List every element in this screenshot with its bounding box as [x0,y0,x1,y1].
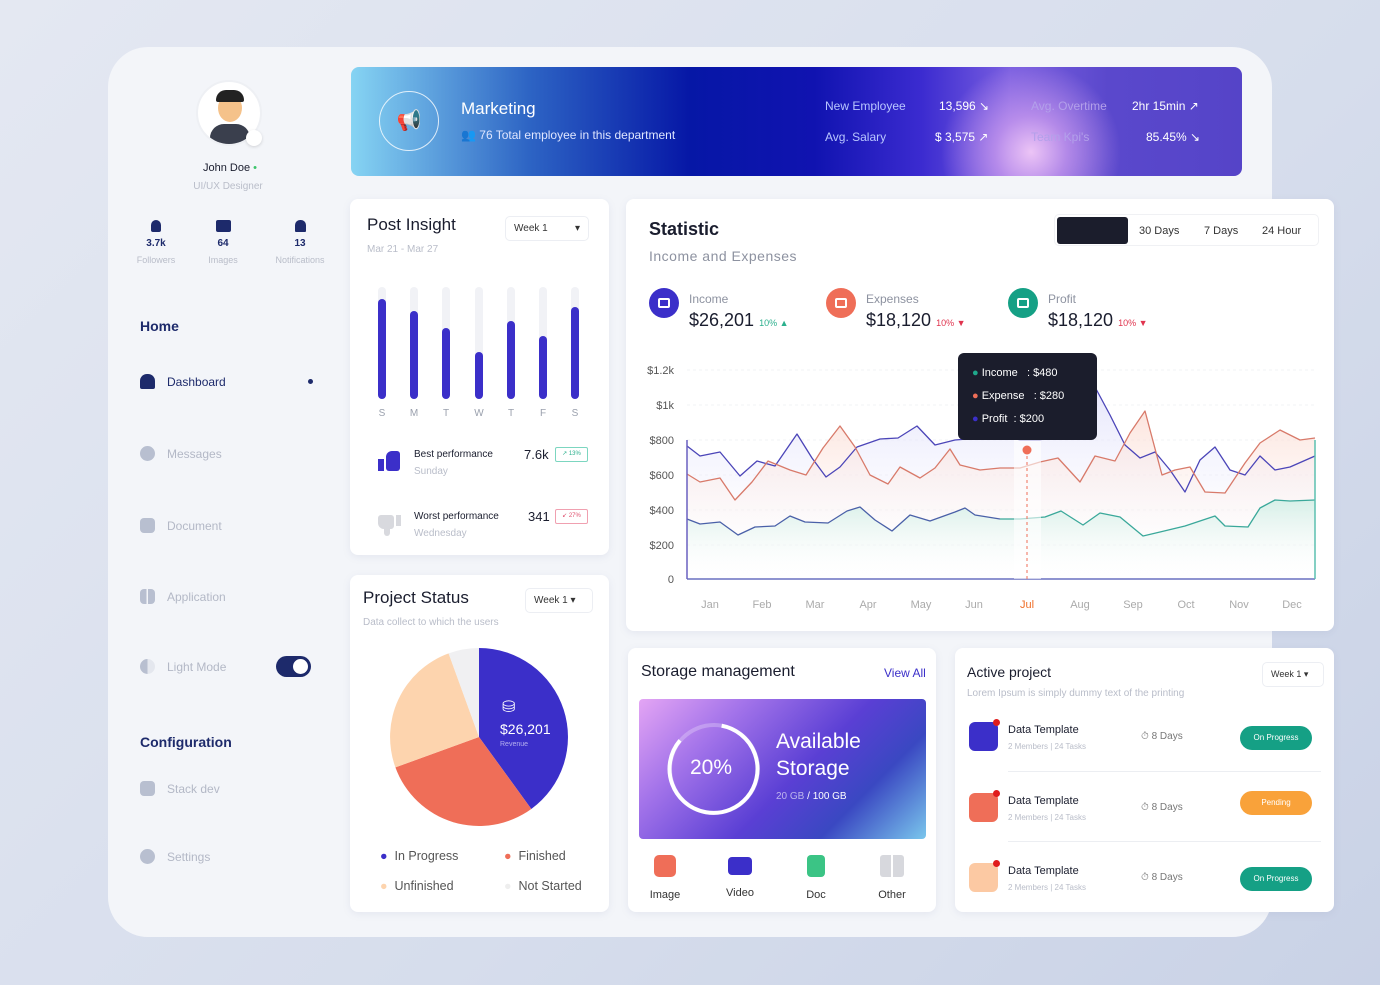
panel: post insight: Week 1 [514,223,548,234]
project row 3: Data Template [1008,865,1079,877]
line chart: $200 [650,540,674,552]
line chart: $400 [650,505,674,517]
panel: post insight: Mar 21 - Mar 27 [367,244,438,255]
project row 3 [969,860,1312,892]
nav: settings: Settings [167,850,210,864]
name: John Doe • [203,162,257,174]
bar chart: T [443,408,449,419]
line chart: Jan [701,599,719,611]
storage icons [650,855,906,901]
panel: active project [955,648,1334,912]
banner stats: New Employee [825,99,906,113]
storage card: Available [776,730,861,753]
nav: application: Application [167,590,226,604]
panel: project status: Week 1 ▾ [534,595,576,606]
tooltip: ● Income : $480 [972,367,1058,379]
banner stats: Avg. Overtime [1031,99,1107,113]
stats [137,220,325,265]
line chart: $1k [656,400,674,412]
nav: stack dev: Stack dev [167,782,220,796]
worst performance: ↙ 27% [562,513,581,519]
banner: marketing: 👥 76 Total employee in this department [461,128,675,142]
project row 2: Pending [1261,798,1291,807]
stats: 13 [294,238,306,249]
panel: post insight: ▾ [575,223,580,234]
nav: settings [140,849,210,864]
bar chart: F [540,408,546,419]
banner stats: 2hr 15min ↗ [1132,99,1199,113]
line chart: Feb [753,599,771,611]
panel: post insight: Post Insight [367,215,456,234]
kpi: income: $26,201 10% ▲ [689,310,788,330]
bar chart: S [379,408,386,419]
storage icons: Doc [806,889,826,901]
nav: light mode: Light Mode [167,660,226,674]
storage card: 20 GB / 100 GB [776,791,847,802]
line chart: $800 [650,435,674,447]
sidebar profile [193,82,263,192]
nav: dashboard: Dashboard [167,374,226,388]
stats: 3.7k [146,238,166,249]
time tabs: 30 Days [1139,225,1179,237]
panel: project status: Data collect to which the users [363,617,499,628]
project row 3: ⏱ 8 Days [1141,872,1183,883]
best performance: ↗ 13% [562,451,581,457]
project row 1: On Progress [1254,733,1298,742]
toggle [276,656,311,677]
project row 1: ⏱ 8 Days [1141,731,1183,742]
tooltip [958,353,1097,440]
panel: post insight [350,199,609,555]
worst performance: Wednesday [414,528,467,539]
best performance [378,447,588,477]
panel: statistic [626,199,1334,631]
bar chart: T [508,408,514,419]
bar chart [378,287,579,419]
best performance: Sunday [414,466,448,477]
icon: megaphone [379,91,439,151]
banner stats [825,99,1200,144]
kpi: profit: $18,120 10% ▼ [1048,310,1148,330]
line chart: $1.2k [647,365,674,377]
time tabs: 24 Hour [1262,225,1301,237]
nav: document [140,518,222,533]
project row 1 [969,719,1312,751]
kpi: expenses: Expenses [866,292,919,306]
bar chart: W [474,408,484,419]
time tabs [1054,214,1319,246]
line chart: 0 [668,574,674,586]
time tabs: 7 Days [1204,225,1238,237]
pie chart: $26,201 [500,721,551,737]
kpi: profit [1008,288,1148,330]
pie chart: Revenue [500,741,528,748]
icon: megaphone: 📢 [397,110,421,132]
panel: storage management: View All [884,666,926,680]
line chart: Apr [859,599,877,611]
nav: messages [140,446,222,461]
line chart: May [911,599,932,611]
worst performance: Worst performance [414,511,499,522]
project row 1: Data Template [1008,724,1079,736]
panel: project status: Project Status [363,588,469,607]
banner stats: Team Kpi's [1031,130,1089,144]
storage card: 20% [690,756,732,779]
main panel [108,47,1272,937]
storage card: Storage [776,757,850,780]
worst performance [378,509,588,539]
project row 2: 2 Members | 24 Tasks [1008,813,1086,822]
line chart: Aug [1070,599,1090,611]
kpi: profit: Profit [1048,292,1076,306]
nav: application [140,589,226,604]
pie legend: ● In Progress [380,849,458,863]
storage icons: Other [878,889,906,901]
pie legend: ● Finished [504,849,566,863]
bar chart: M [410,408,418,419]
pie legend: ● Unfinished [380,879,454,893]
banner: marketing: Marketing [461,99,536,118]
panel: statistic: Statistic [649,219,719,239]
banner stats: 85.45% ↘ [1146,130,1200,144]
banner stats: $ 3,575 ↗ [935,130,988,144]
storage card [639,699,926,839]
nav: messages: Messages [167,446,222,460]
pie legend [380,849,582,893]
stats: Followers [137,255,175,265]
pie legend: ● Not Started [504,879,582,893]
panel: storage management [628,648,936,912]
project row 3: On Progress [1254,874,1298,883]
banner stats: 13,596 ↘ [939,99,989,113]
tooltip: ● Profit : $200 [972,413,1044,425]
kpi: income [649,288,788,330]
banner stats: Avg. Salary [825,130,886,144]
nav: home: Home [140,318,179,334]
kpi: income: Income [689,292,728,306]
nav: document: Document [167,518,222,532]
line chart: Dec [1282,599,1302,611]
panel: project status [350,575,609,912]
configuration heading: Configuration [140,734,232,750]
line chart: Nov [1229,599,1249,611]
panel: active project: Lorem Ipsum is simply dummy text of the printing [967,688,1184,699]
tooltip: ● Expense : $280 [972,390,1064,402]
nav: dashboard [140,374,313,389]
kpi: expenses [826,288,966,330]
avatar [196,80,262,146]
line chart: Jul [1020,599,1034,611]
stats: 64 [217,238,229,249]
project row 1: 2 Members | 24 Tasks [1008,742,1086,751]
project row 2: ⏱ 8 Days [1141,802,1183,813]
bar chart: S [572,408,579,419]
nav: stack dev [140,781,220,796]
line chart: Mar [806,599,825,611]
stats: Notifications [275,255,325,265]
banner: marketing [351,67,1242,176]
sidebar profile: UI/UX Designer [193,181,263,192]
panel: storage management: Storage management [641,663,795,680]
project row 2 [969,790,1312,822]
line chart [647,365,1316,611]
stats: Images [208,255,238,265]
kpi: expenses: $18,120 10% ▼ [866,310,966,330]
worst performance: 341 [528,509,550,524]
pie chart: ⛁ [502,699,515,716]
best performance: 7.6k [524,447,549,462]
panel: active project: Week 1 ▾ [1271,669,1308,679]
project row 2: Data Template [1008,795,1079,807]
project row 3: 2 Members | 24 Tasks [1008,883,1086,892]
panel: active project: Active project [967,664,1051,680]
line chart: Sep [1123,599,1143,611]
line chart: Jun [965,599,983,611]
line chart: Oct [1177,599,1195,611]
panel: statistic: Income and Expenses [649,248,797,264]
best performance: Best performance [414,449,493,460]
pie chart [390,648,568,826]
storage icons: Video [726,887,754,899]
storage icons: Image [650,889,680,901]
line chart: $600 [650,470,674,482]
nav: light mode [140,659,226,674]
